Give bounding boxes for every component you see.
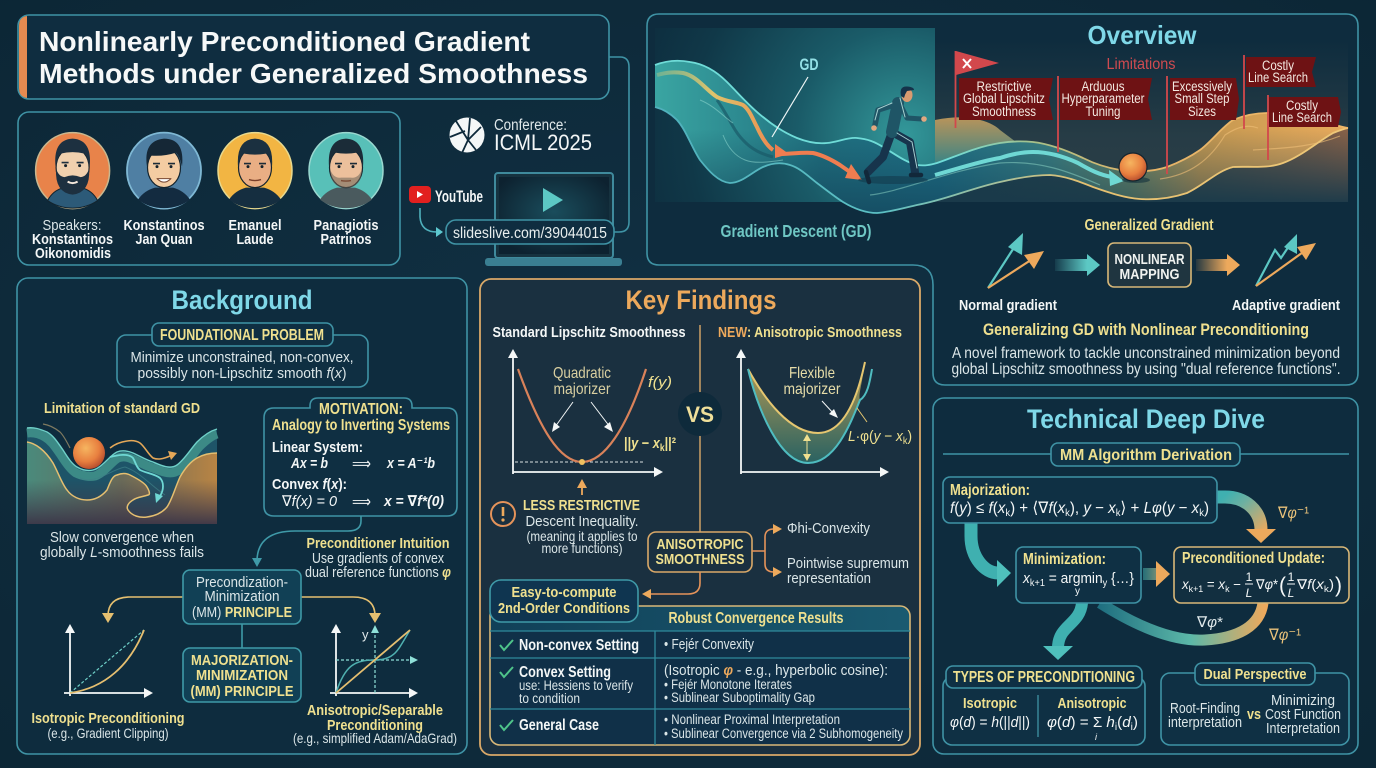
icon: red flag	[956, 51, 999, 128]
box: types of preconditioning: )	[1133, 714, 1138, 731]
arrows: principle to preconditioning types	[102, 597, 381, 648]
box: minimization: = argmin	[1045, 570, 1103, 587]
label: GD	[772, 55, 818, 137]
table: robust convergence results: Robust Convergence Results	[668, 610, 844, 627]
preconditioner intuition	[305, 535, 451, 581]
row: convex setting	[500, 662, 888, 706]
box: types of preconditioning: i	[1115, 722, 1117, 733]
box: preconditioned update: L	[1246, 586, 1252, 600]
row: convex setting: • Fejér Monotone Iterates	[664, 677, 792, 692]
box: preconditioning minimization principle: Minimization	[204, 589, 280, 605]
box: majorization: k	[1199, 508, 1205, 519]
conference block	[450, 117, 592, 155]
text: anisotropic properties	[787, 520, 909, 587]
motivation box: Linear System:	[272, 439, 363, 456]
flag: costly line search 2: Costly	[1286, 98, 1318, 113]
chart: standard smoothness: k	[660, 443, 665, 454]
row: convex setting: (Isotropic φ - e.g., hyperbolic cosine):	[664, 662, 888, 679]
illustration: gradient descent landscape	[655, 28, 1348, 213]
icon: runner	[858, 86, 928, 184]
motivation box: x = ∇f*(0)	[383, 493, 444, 510]
caption: isotropic: Isotropic Preconditioning	[32, 710, 184, 727]
box: minimization: {…}	[1107, 570, 1134, 587]
subheading: Generalizing GD with Nonlinear Preconditioning	[983, 321, 1309, 339]
box: nonlinear mapping: MAPPING	[1120, 266, 1180, 283]
box: preconditioned update: (	[1279, 574, 1286, 597]
video link block	[409, 173, 622, 266]
box: minimization: y	[1075, 586, 1080, 597]
box: anisotropic smoothness	[648, 532, 752, 572]
text: anisotropic properties: representation	[787, 570, 871, 587]
box: types of preconditioning: Isotropic	[963, 695, 1017, 712]
arrow: input to mapping	[1055, 254, 1100, 276]
chart: anisotropic smoothness: k	[903, 436, 908, 447]
speaker names: Konstantinos	[124, 218, 204, 234]
flag: restrictive smoothness: Global Lipschitz	[963, 91, 1045, 106]
box: dual perspective: Root-Finding	[1170, 700, 1240, 717]
heading: Technical Deep Dive: Technical Deep Dive	[1027, 404, 1265, 434]
row: general case: General Case	[519, 717, 599, 734]
box: majorization: k	[1116, 508, 1121, 519]
preconditioner intuition: Preconditioner Intuition	[306, 535, 450, 552]
flag: small step sizes: Excessively	[1172, 79, 1232, 94]
box: types of preconditioning: i	[1131, 722, 1133, 733]
box: majorization: k	[1005, 508, 1011, 519]
speaker portrait: Konstantinos Jan Quan	[127, 133, 201, 209]
speaker names: Laude	[236, 232, 274, 248]
illustration: limitation landscape	[27, 424, 217, 524]
flag: small step sizes	[1167, 76, 1239, 174]
box: types of preconditioning: (	[1117, 714, 1122, 731]
box: types of preconditioning: φ(d) = h(||d||)	[950, 714, 1030, 731]
flag: small step sizes: Small Step	[1174, 91, 1230, 106]
flag: small step sizes: Sizes	[1188, 104, 1216, 119]
speaker portrait: Panagiotis Patrinos	[309, 133, 383, 209]
box: minimization	[1016, 547, 1141, 603]
flag: costly line search 1: Line Search	[1248, 70, 1308, 85]
box: types of preconditioning: i	[1095, 732, 1098, 742]
generalized gradient diagram	[959, 217, 1340, 314]
box: majorization: y − x	[1083, 500, 1116, 517]
flag: hyperparameter tuning: Tuning	[1086, 104, 1120, 119]
box: preconditioning minimization principle	[183, 570, 301, 624]
overview description	[952, 345, 1340, 378]
text: anisotropic properties: Φhi-Convexity	[787, 520, 870, 537]
speaker names: Panagiotis	[314, 218, 378, 234]
arrow: YouTube to link	[420, 208, 443, 237]
box: nonlinear mapping: NONLINEAR	[1114, 251, 1185, 268]
box: preconditioned update: k	[1225, 584, 1230, 594]
link pill	[446, 220, 614, 244]
box: majorization: )	[1204, 500, 1209, 517]
limitations flags	[956, 51, 1341, 174]
heading: Background: Background	[172, 285, 312, 315]
column headings: Standard Lipschitz Smoothness	[492, 324, 686, 341]
flag: restrictive smoothness: Smoothness	[972, 104, 1036, 119]
row: convex setting: • Sublinear Suboptimality Gap	[664, 690, 815, 705]
icon: warning	[491, 502, 515, 526]
motivation box: x = A⁻¹b	[386, 455, 435, 472]
box: preconditioned update: 1	[1246, 570, 1253, 584]
box: majorization: ) + ⟨∇	[1010, 500, 1049, 517]
caption: anisotropic: (e.g., simplified Adam/AdaGrad)	[293, 730, 457, 746]
box: preconditioned update	[1174, 547, 1349, 603]
motivation box: ⟹	[352, 456, 371, 473]
label: Gradient Descent: Gradient Descent (GD)	[720, 221, 872, 241]
VS badge	[678, 392, 722, 436]
box: preconditioned update: =	[1203, 577, 1218, 592]
flag: restrictive smoothness	[959, 78, 1053, 120]
box: anisotropic smoothness: SMOOTHNESS	[656, 551, 744, 568]
box: dual perspective: vs	[1247, 706, 1261, 723]
arrow: mapping to output	[1196, 254, 1240, 276]
box: preconditioned update: )	[1335, 574, 1342, 597]
box: minimization: Minimization:	[1023, 551, 1106, 568]
title banner: Nonlinearly Preconditioned Gradient	[39, 26, 530, 57]
panel: key findings	[480, 279, 920, 755]
heading: Key Findings: Key Findings	[626, 285, 776, 315]
chart: standard smoothness: ||y − x	[624, 435, 661, 452]
preconditioner intuition: dual reference functions φ	[305, 565, 451, 581]
motivation box: ∇f(x) = 0	[281, 493, 338, 510]
box: majorization: ),	[1070, 500, 1083, 517]
row: non-convex setting: • Fejér Convexity	[664, 637, 755, 653]
flag: hyperparameter tuning	[1058, 76, 1152, 152]
link pill: slideslive.com/39044015	[453, 225, 607, 242]
flag: costly line search 1: Costly	[1262, 58, 1294, 73]
chart: anisotropic smoothness: )	[907, 428, 912, 445]
box: majorization: f(y) ≤ f(x	[950, 500, 1006, 517]
chart: standard smoothness: majorizer	[554, 381, 611, 398]
panel: background	[17, 278, 467, 754]
flag: hyperparameter tuning: Hyperparameter	[1062, 91, 1145, 106]
chart: anisotropic smoothness: Flexible	[789, 365, 835, 382]
arrow: majorization to minimization	[971, 523, 1011, 587]
speaker names: Oikonomidis	[35, 246, 111, 262]
box: minimization: y	[1103, 578, 1107, 589]
overview description: A novel framework to tackle unconstrained minimization beyond	[952, 345, 1340, 362]
box: anisotropic smoothness: ANISOTROPIC	[656, 536, 744, 553]
text: anisotropic properties: Pointwise supremum	[787, 555, 909, 572]
limitations flags: Limitations	[1106, 56, 1176, 73]
label: nabla phi inverse top: ∇φ⁻¹	[1277, 505, 1309, 522]
panel: overview	[647, 14, 1358, 385]
limitation of standard GD: Limitation of standard GD	[44, 400, 200, 417]
flag: costly line search 1	[1244, 55, 1316, 129]
motivation box: ⟹	[352, 494, 371, 511]
heading: Overview: Overview	[1088, 20, 1197, 50]
box: preconditioned update: ∇φ*	[1255, 577, 1279, 592]
icon: ball	[1119, 153, 1150, 183]
arrow: minimization to types	[1043, 603, 1082, 660]
box: majorization minimization principle: MINIMIZATION	[196, 667, 288, 684]
row: convex setting: Convex Setting	[519, 664, 611, 681]
box: dual perspective: interpretation	[1168, 714, 1242, 731]
box: preconditioned update: −	[1230, 577, 1241, 592]
row: general case: • Sublinear Convergence via 2 Subhomogeneity	[664, 726, 903, 741]
arrow: motivation to principle	[252, 516, 361, 567]
foundational problem box	[117, 323, 368, 387]
conference block: ICML 2025	[494, 130, 592, 155]
box: types of preconditioning: d	[1122, 714, 1131, 731]
less restrictive note: (meaning it applies to	[526, 528, 638, 544]
row: non-convex setting: Non-convex Setting	[519, 637, 639, 654]
box: majorization: Majorization:	[950, 482, 1030, 499]
panel: speakers	[18, 112, 400, 265]
limitation of standard GD: Slow convergence when	[50, 529, 194, 546]
arrow: minimization to update	[1143, 561, 1170, 587]
chart: isotropic preconditioning	[64, 624, 153, 698]
preconditioner intuition: Use gradients of convex	[312, 551, 445, 567]
speaker names: Konstantinos	[32, 232, 113, 248]
conference block: Conference:	[494, 117, 567, 134]
icon: YouTube: YouTube	[435, 187, 483, 206]
icon: ICML logo	[450, 118, 484, 153]
box: preconditioned update: k+1	[1189, 584, 1203, 594]
flag: costly line search 2: Line Search	[1272, 110, 1332, 125]
chart: anisotropic preconditioning	[330, 624, 418, 698]
box: preconditioned update: 1	[1288, 570, 1295, 584]
box: dual perspective: Dual Perspective	[1204, 666, 1306, 683]
speaker names	[32, 218, 378, 262]
less restrictive note	[523, 497, 640, 556]
chart: anisotropic smoothness: L·φ(y − x	[848, 428, 904, 445]
box: dual perspective: Cost Function	[1265, 706, 1341, 723]
box: majorization minimization principle: (MM) PRINCIPLE	[190, 683, 294, 700]
row: general case	[500, 712, 903, 741]
panel: technical deep dive	[933, 398, 1358, 754]
arrow: majorization to update	[1217, 497, 1276, 543]
caption: isotropic	[32, 710, 184, 741]
box: preconditioned update: )	[1329, 577, 1334, 592]
box: minimization: k+1	[1030, 578, 1045, 589]
flag: costly line search 2	[1268, 95, 1341, 160]
box: types of preconditioning	[943, 666, 1145, 745]
box: preconditioning minimization principle: Precondization-	[196, 575, 288, 591]
chart: standard smoothness: f(y)	[648, 374, 672, 391]
speaker portrait: Konstantinos Oikonomidis	[36, 133, 110, 209]
box: majorization: k	[1065, 508, 1071, 519]
icon: YouTube	[409, 186, 483, 206]
generalized gradient diagram: Normal gradient	[959, 297, 1057, 314]
title banner	[18, 15, 609, 99]
caption: anisotropic: Preconditioning	[327, 717, 423, 734]
box: preconditioned update: k	[1324, 584, 1330, 594]
box: preconditioned update: ∇f(x	[1297, 577, 1323, 592]
chart: anisotropic preconditioning: y	[362, 627, 369, 642]
box: easy-to-compute conditions	[490, 580, 638, 622]
box: preconditioned update: x	[1217, 577, 1226, 592]
flag: hyperparameter tuning: Arduous	[1082, 79, 1125, 94]
box: types of preconditioning: TYPES OF PRECONDITIONING	[953, 669, 1135, 686]
icon: adaptive gradient arrows	[1256, 234, 1316, 286]
less restrictive note: Descent Inequality.	[526, 513, 638, 530]
caption: anisotropic: Anisotropic/Separable	[307, 702, 443, 719]
icon: normal gradient arrows	[988, 233, 1044, 288]
box: majorization	[943, 477, 1217, 523]
chart: anisotropic smoothness	[736, 349, 912, 477]
VS badge: VS	[686, 402, 714, 427]
box: nonlinear mapping	[1108, 243, 1191, 287]
speaker names: Emanuel	[228, 218, 282, 234]
less restrictive note: LESS RESTRICTIVE	[523, 497, 640, 514]
box: majorization: Lφ(y − x	[1144, 500, 1200, 517]
column headings: NEW: Anisotropic Smoothness	[718, 324, 902, 341]
row: general case: • Nonlinear Proximal Interpretation	[664, 712, 840, 727]
box: easy-to-compute conditions: Easy-to-compute	[512, 584, 616, 601]
icon: laptop	[485, 173, 622, 266]
limitation of standard GD	[27, 400, 217, 561]
box: majorization minimization principle	[183, 648, 301, 702]
box: minimization: x	[1022, 570, 1030, 587]
box: preconditioned update: Preconditioned Update:	[1182, 550, 1325, 567]
box: majorization: f(x	[1048, 500, 1066, 517]
box: preconditioned update: L	[1288, 586, 1294, 600]
box: easy-to-compute conditions: 2nd-Order Conditions	[498, 600, 630, 617]
column headings	[492, 324, 902, 341]
chart: standard smoothness: Quadratic	[553, 365, 611, 382]
subheading pill: MM algorithm	[943, 443, 1349, 466]
caption: anisotropic	[293, 702, 457, 746]
arrow: toward the minimum	[935, 152, 1124, 186]
box: dual perspective: Minimizing	[1271, 692, 1335, 709]
foundational problem box: Minimize unconstrained, non-convex,	[130, 349, 354, 366]
foundational problem box: possibly non-Lipschitz smooth f(x)	[138, 365, 346, 382]
motivation box: MOTIVATION:	[319, 401, 403, 418]
title banner: Methods under Generalized Smoothness	[39, 58, 588, 89]
box: types of preconditioning: Anisotropic	[1058, 695, 1126, 712]
chart: standard smoothness	[508, 349, 676, 477]
motivation box: Convex f(x):	[272, 476, 347, 493]
box: dual perspective: Interpretation	[1266, 720, 1340, 737]
flag: restrictive smoothness: Restrictive	[976, 79, 1032, 94]
motivation box	[264, 398, 457, 516]
box: preconditioning minimization principle: (MM) PRINCIPLE	[192, 605, 292, 621]
box: preconditioned update: x	[1181, 577, 1190, 592]
speaker portrait: Emanuel Laude	[218, 133, 292, 209]
arrows: anisotropic branches	[642, 524, 782, 599]
row: convex setting: to condition	[519, 691, 580, 706]
motivation box: Analogy to Inverting Systems	[272, 417, 450, 434]
arrow: less restrictive pointer	[577, 479, 587, 495]
speaker names: Speakers:	[42, 218, 102, 234]
chart: anisotropic smoothness: majorizer	[784, 381, 841, 398]
box: types of preconditioning: φ(d) = Σ h	[1047, 714, 1115, 731]
label: nabla phi star: ∇φ*	[1196, 614, 1223, 631]
box: dual perspective	[1161, 663, 1349, 745]
chart: standard smoothness: ||²	[665, 435, 676, 452]
less restrictive note: more functions)	[542, 540, 622, 556]
speaker names: Patrinos	[320, 232, 372, 248]
limitation of standard GD: globally L-smoothness fails	[40, 544, 204, 561]
generalized gradient diagram: Adaptive gradient	[1232, 297, 1340, 314]
arrow: GD descent path	[657, 72, 862, 180]
subheading pill: MM algorithm: MM Algorithm Derivation	[1060, 447, 1232, 464]
connector: title to video link	[609, 57, 629, 232]
row: non-convex setting	[500, 637, 755, 654]
motivation box: Ax = b	[290, 455, 328, 472]
row: convex setting: use: Hessiens to verify	[519, 678, 633, 693]
generalized gradient diagram: Generalized Gradient	[1084, 217, 1214, 234]
box: majorization: ⟩ +	[1120, 500, 1144, 517]
foundational problem box: FOUNDATIONAL PROBLEM	[160, 327, 324, 344]
arrow: update curve	[1100, 603, 1263, 640]
box: majorization minimization principle: MAJORIZATION-	[191, 652, 293, 669]
speaker names: Jan Quan	[136, 232, 192, 248]
label: nabla phi inverse bottom: ∇φ⁻¹	[1268, 627, 1301, 644]
label: GD: GD	[800, 55, 818, 74]
table: robust convergence results	[490, 606, 910, 745]
caption: isotropic: (e.g., Gradient Clipping)	[48, 725, 168, 741]
